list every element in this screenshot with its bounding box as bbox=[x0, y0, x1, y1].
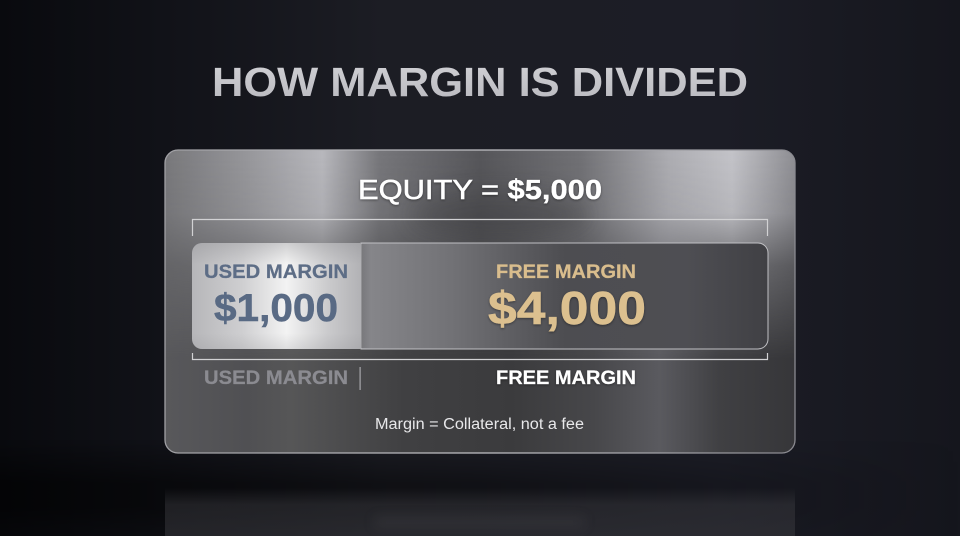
divider tick bbox=[360, 367, 361, 390]
segment: used margin bbox=[192, 243, 361, 349]
bar: margin split bbox=[192, 243, 768, 349]
title: HOW MARGIN IS DIVIDED bbox=[212, 59, 748, 105]
panel border bbox=[165, 150, 795, 453]
lower label: used margin: USED MARGIN bbox=[204, 367, 348, 389]
floor shade bbox=[2, 462, 708, 528]
bottom bracket bbox=[192, 353, 768, 360]
equity heading: EQUITY = $5,000 bbox=[358, 174, 602, 205]
panel surface bbox=[165, 150, 795, 453]
footnote: Margin = Collateral, not a fee bbox=[375, 416, 584, 433]
free margin label: FREE MARGIN bbox=[496, 261, 636, 283]
floor reflection bbox=[165, 488, 795, 536]
used margin label: USED MARGIN bbox=[204, 261, 348, 283]
lower label: free margin: FREE MARGIN bbox=[496, 367, 636, 389]
used margin value: $1,000 bbox=[214, 287, 338, 330]
panel: equity glass card bbox=[165, 150, 795, 453]
free margin value: $4,000 bbox=[488, 282, 646, 334]
segment: free margin bbox=[361, 243, 768, 349]
top bracket bbox=[192, 220, 768, 236]
